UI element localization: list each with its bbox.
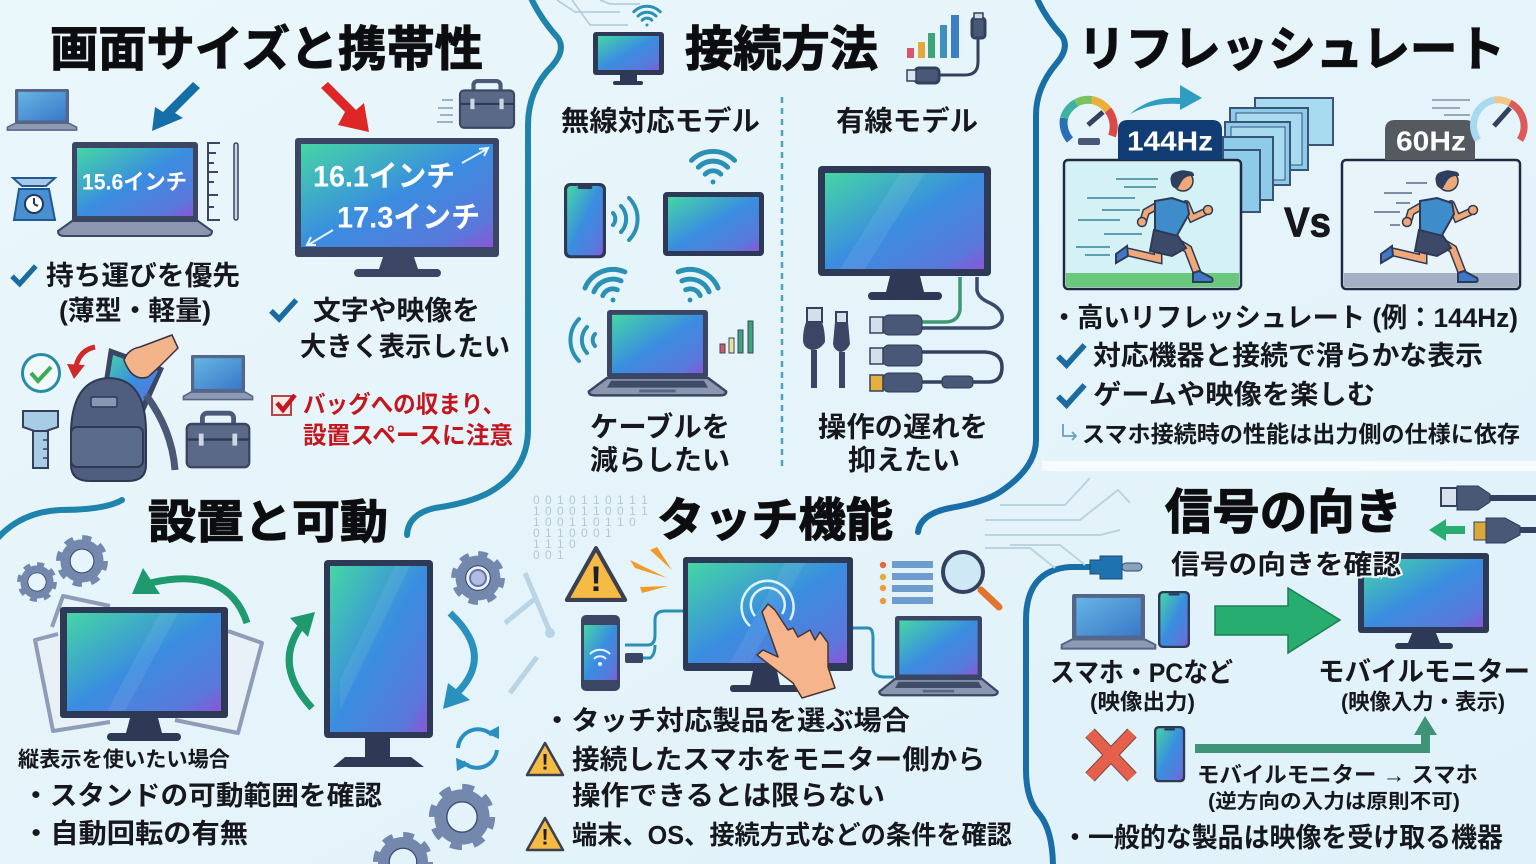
arrow: large green: [1215, 588, 1340, 653]
text: reduce lag 2: 抑えたい: [848, 444, 960, 476]
panel: signal direction: [985, 478, 1536, 853]
text: fewer cables 2: 減らしたい: [590, 444, 730, 476]
icon: hand pointing: [757, 604, 835, 698]
text: check direction: 信号の向きを確認: [1171, 550, 1401, 580]
text: thin and light: (薄型・軽量): [59, 296, 211, 326]
text: show large line 2: 大きく表示したい: [300, 332, 510, 362]
icon: warning 1: [527, 743, 563, 775]
laptop 15.6 inch: [58, 142, 212, 236]
icon: magnifier: [943, 552, 999, 607]
decoration: binary digits: 1 0 0 1 1 0 1 1 0: [533, 515, 637, 529]
icon: ghost monitor frames: [35, 596, 262, 733]
icon: cross mark: [1090, 733, 1132, 777]
text: reduce lag 1: 操作の遅れを: [818, 412, 988, 442]
icon: green check badge: [22, 354, 60, 392]
text: warn line 1: 接続したスマホをモニター側から: [572, 745, 985, 775]
icon: orange burst: [630, 547, 672, 593]
arrow: green tilt: [132, 568, 247, 623]
text: games: ゲームや映像を楽しむ: [1093, 380, 1375, 410]
icon: phone reverse: [1154, 726, 1185, 782]
text: choose touch: ・タッチ対応製品を選ぶ場合: [543, 706, 910, 736]
icon: wireless laptop: [589, 310, 726, 395]
icon: wifi left: [582, 264, 634, 310]
heading: touch: タッチ機能: [657, 494, 893, 546]
icon: tablet: [663, 192, 764, 256]
icon: USB plugs: [803, 308, 850, 388]
icon: gear bottom: [377, 836, 429, 864]
text: phone limitation: スマホ接続時の性能は出力側の仕様に依存: [1082, 421, 1520, 447]
text: show large line 1: 文字や映像を: [313, 296, 480, 326]
check: games: [1058, 385, 1085, 405]
check: smooth display: [1058, 345, 1085, 365]
icon: cable: [907, 13, 985, 83]
label: 144Hz: 144Hz: [1127, 126, 1213, 156]
icon: envelope ruler: [23, 411, 58, 468]
icon: touch monitor: [683, 557, 853, 692]
icon: signal bars: [907, 15, 959, 58]
badge: 144Hz: [1118, 120, 1222, 160]
arrow: blue: [152, 82, 200, 131]
text: destination: モバイルモニター: [1318, 657, 1530, 687]
icon: gear lower: [434, 789, 490, 845]
icon: monitor: [593, 32, 664, 85]
text: video input: (映像入力・表示): [1341, 690, 1505, 714]
text: video output: (映像出力): [1090, 690, 1195, 714]
icon: scale: [13, 178, 55, 220]
icon: frame stack: [1223, 98, 1333, 212]
icon: briefcase 2: [187, 413, 249, 467]
label: 60Hz: 60Hz: [1396, 126, 1466, 156]
decoration: binary digits: 1 1 1 0: [533, 537, 577, 551]
icon: wifi top: [634, 6, 660, 27]
panel: installation and movement: [18, 496, 501, 864]
icon: slow gauge: [1432, 100, 1524, 140]
icon: wifi right: [669, 264, 721, 310]
icon: phone: [564, 183, 606, 258]
icon: connectors: [870, 315, 973, 392]
icon: portrait monitor: [324, 560, 433, 767]
text: high refresh: ・高いリフレッシュレート (例：144Hz): [1051, 303, 1518, 333]
icon: landscape monitor: [60, 607, 228, 741]
icon: source phone: [1158, 591, 1190, 648]
icon: auto rotate: [456, 726, 499, 771]
icon: USB connector: [1441, 486, 1536, 510]
arrow: red curved: [67, 347, 95, 379]
text: warning line 2: 設置スペースに注意: [303, 422, 513, 450]
icon: plug: [1090, 556, 1142, 579]
arrow: fast motion: [1130, 85, 1202, 114]
label: 17.3 inch: 17.3インチ: [337, 202, 480, 234]
panel: refresh rate: [1051, 24, 1524, 447]
decoration: binary digits: 0 1 1 0 0 0 1: [533, 526, 613, 540]
decoration: binary digits: 0 0 1: [533, 548, 565, 562]
check: portability: [12, 266, 36, 284]
icon: backpack with tablet: [71, 335, 178, 481]
icon: ruler: [208, 143, 238, 220]
icon: gear right: [455, 555, 501, 601]
arrow: red: [321, 82, 369, 132]
text: prioritise carrying: 持ち運びを優先: [46, 261, 240, 291]
icon: small laptop 2: [183, 355, 253, 400]
icon: cables to monitor: [920, 277, 1002, 382]
heading: connection: 接続方法: [685, 24, 878, 76]
icon: monitor destination: [1358, 553, 1489, 649]
text: stand range: ・スタンドの可動範囲を確認: [22, 781, 382, 811]
text: source: スマホ・PCなど: [1050, 658, 1233, 688]
icon: HDMI connector: [1474, 518, 1536, 543]
arrow: reverse direction: [1195, 716, 1437, 753]
frame: 144Hz runner: [1064, 160, 1241, 289]
icon: briefcase: [460, 81, 514, 128]
arrow: small green: [1429, 519, 1465, 541]
icon: gears: [20, 539, 104, 599]
text: versus: Vs: [1284, 198, 1331, 246]
icon: list: [880, 561, 933, 604]
panel: touch function: [505, 493, 1012, 850]
icon: red checkbox: [272, 395, 295, 415]
text: monitor to phone: モバイルモニター → スマホ: [1197, 762, 1478, 788]
text: portrait use: 縦表示を使いたい場合: [18, 748, 230, 772]
icon: wired monitor: [818, 166, 991, 300]
heading: refresh rate: リフレッシュレート: [1078, 24, 1505, 76]
text: smooth display: 対応機器と接続で滑らかな表示: [1093, 341, 1483, 371]
panel: connection method: [557, 0, 1002, 476]
decoration: circuit: [557, 0, 640, 25]
text: wired model: 有線モデル: [836, 104, 978, 136]
label: 15.6 inch: 15.6インチ: [82, 170, 187, 194]
frame: 60Hz runner: [1342, 160, 1520, 289]
arrow: green rotate: [289, 612, 315, 708]
icon: sub arrow: [1063, 424, 1076, 440]
text: reverse not allowed: (逆方向の入力は原則不可): [1208, 790, 1460, 813]
decoration: binary digits: 1 0 0 0 1 1 0 0 1 1: [533, 504, 649, 518]
text: warn line 2: 操作できるとは限らない: [572, 781, 885, 811]
badge: 60Hz: [1385, 120, 1475, 160]
icon: waves from phone: [613, 198, 638, 240]
icon: phone with wifi: [581, 615, 620, 691]
icon: signal bars small: [720, 321, 753, 353]
monitor 16.1 to 17.3 inch: [295, 138, 499, 277]
icon: wifi above tablet: [691, 151, 735, 184]
icon: warning 2: [527, 818, 563, 850]
text: check conditions: 端末、OS、接続方式などの条件を確認: [572, 820, 1012, 850]
check: large view: [271, 300, 296, 319]
text: fewer cables 1: ケーブルを: [590, 410, 730, 442]
panel: screen size and portability: [7, 24, 514, 481]
text: auto rotate: ・自動回転の有無: [22, 819, 248, 849]
heading: screen size: 画面サイズと携帯性: [50, 24, 483, 76]
decoration: circuit lines: [985, 478, 1130, 568]
decoration: binary digits: 0 0 1 0 1 1 0 1 1 1: [533, 493, 649, 507]
icon: large warning: [567, 548, 625, 600]
icon: touch laptop: [879, 616, 998, 695]
text: general product: ・一般的な製品は映像を受け取る機器: [1062, 823, 1503, 853]
decoration: grey tool shape: [505, 573, 555, 693]
heading: installation: 設置と可動: [148, 496, 388, 548]
heading: signal direction: 信号の向き: [1165, 486, 1402, 540]
label: 16.1 inch: 16.1インチ: [313, 160, 455, 194]
text: wireless model: 無線対応モデル: [561, 104, 760, 136]
icon: colourful gauge: [1064, 100, 1114, 145]
speed lines: [437, 100, 453, 122]
icon: source laptop: [1062, 594, 1155, 649]
icon: cables: [625, 611, 894, 677]
icon: small laptop: [7, 89, 77, 130]
arrow: blue rotate: [443, 613, 474, 709]
text: warning line 1: バッグへの収まり、: [303, 390, 505, 418]
icon: waves left of laptop: [570, 319, 595, 361]
